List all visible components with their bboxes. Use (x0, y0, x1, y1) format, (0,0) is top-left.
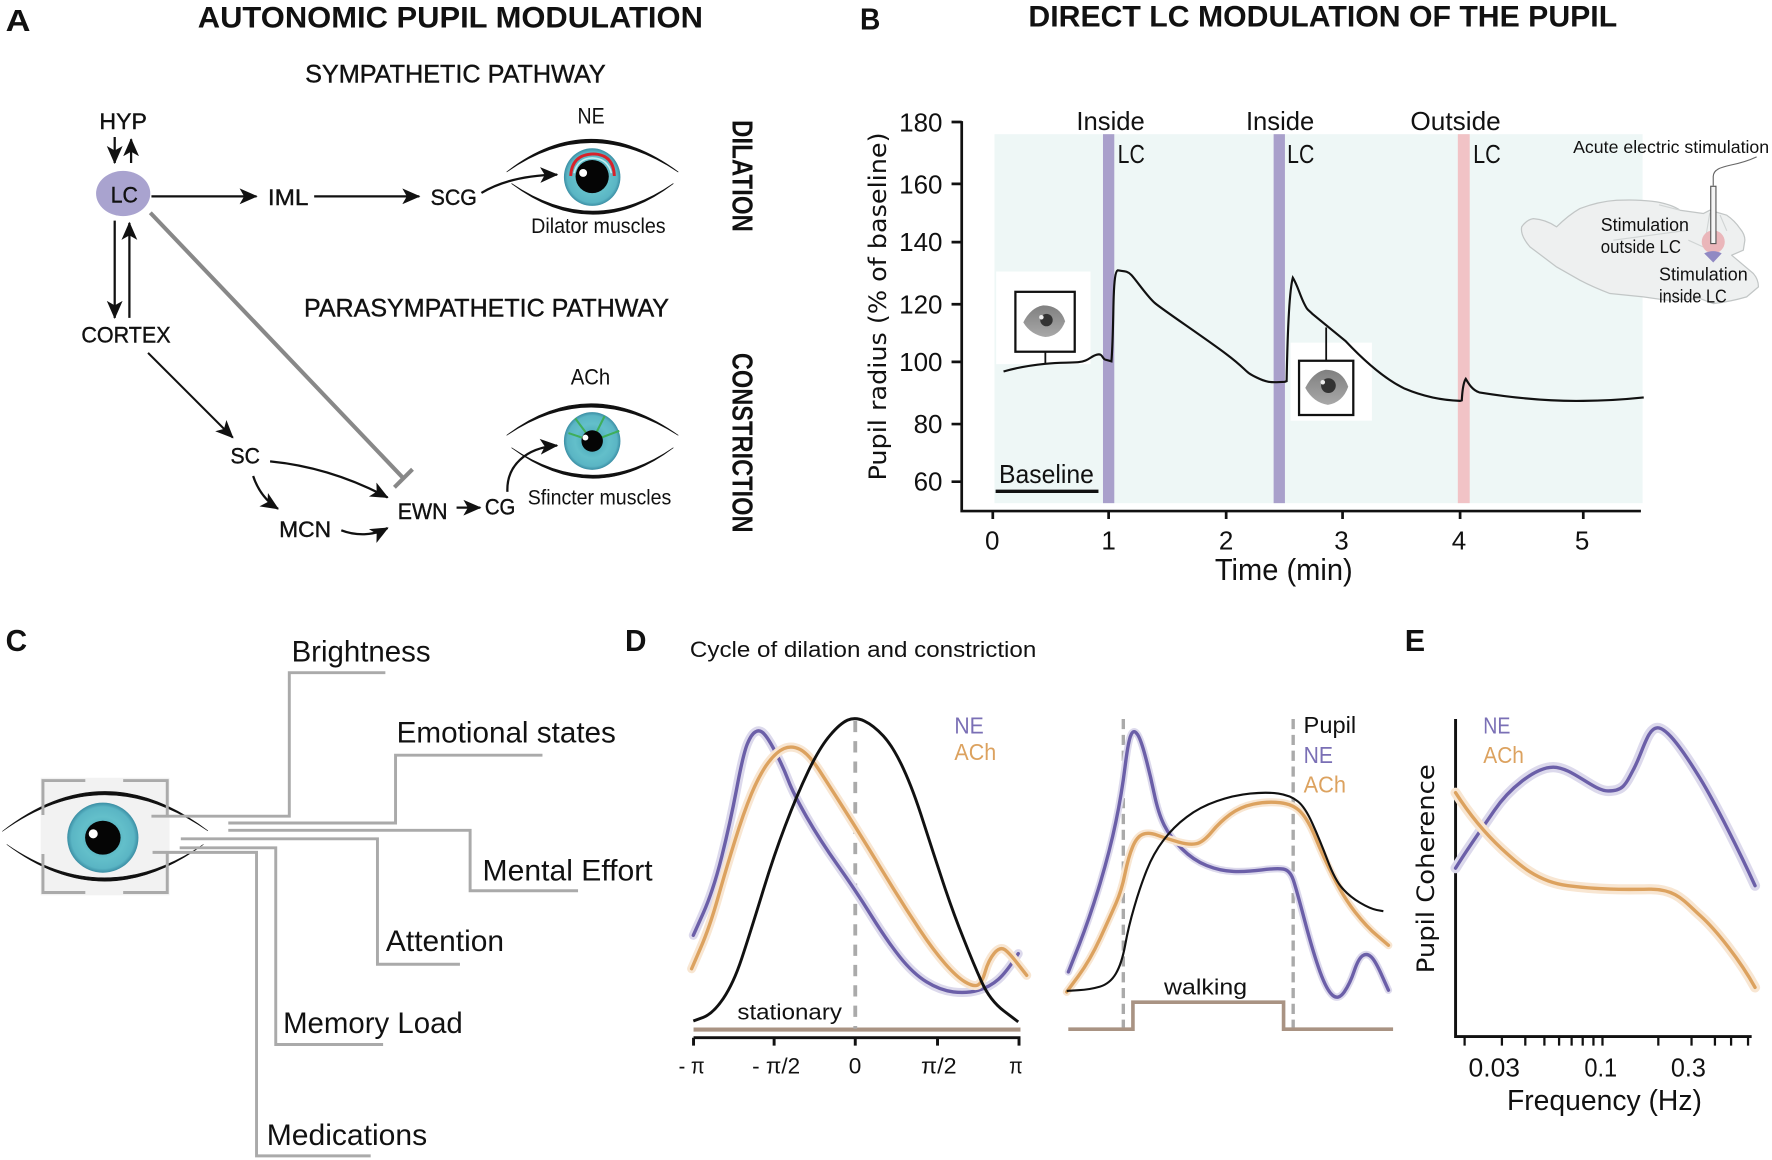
y axis label: Pupil Coherence (1412, 764, 1440, 973)
axes with log ticks (1456, 719, 1752, 1046)
x axis label: Time (min) (1215, 553, 1353, 587)
y axis numbers: 180 (899, 107, 943, 137)
inset: brain diagram: inside LC (1659, 286, 1727, 307)
x axis numbers: 4 (1452, 525, 1466, 555)
labels: stimulation sites: Outside (1410, 106, 1501, 136)
y axis numbers: 100 (899, 347, 943, 377)
title: autonomic pupil modulation: AUTONOMIC PUPIL MODULATION (198, 1, 703, 34)
y axis numbers: 60 (914, 467, 943, 497)
legend (954, 713, 996, 765)
label: NE: NE (577, 103, 605, 128)
label: dilator muscles: Dilator muscles (531, 215, 666, 238)
x axis numbers: 0.03 (1469, 1053, 1520, 1083)
label: mental effort: Mental Effort (483, 855, 653, 888)
phase labels (679, 1053, 1023, 1078)
inset: brain diagram: Stimulation (1601, 214, 1689, 235)
arrow: IML to SCG (314, 195, 419, 197)
x axis numbers: 0 (985, 525, 999, 555)
panel: A autonomic pupil modulation (6, 1, 758, 542)
labels: stimulation sites (1076, 106, 1501, 169)
labels: stimulation sites: Inside (1246, 106, 1314, 136)
panel: C factors affecting the pupil (2, 624, 653, 1156)
phase labels: π (1009, 1053, 1023, 1078)
label: constriction: CONSTRICTION (726, 353, 758, 533)
panel: D cycle of dilation and constriction (625, 624, 1393, 1078)
panel letter B: B (860, 3, 880, 37)
arrow: SCG to eye (481, 175, 557, 193)
labels: stimulation sites: LC (1473, 139, 1501, 169)
node: IML: IML (268, 185, 309, 210)
arrow: cortex to SC (148, 353, 233, 438)
y axis label: Pupil radius (% of baseline) (864, 132, 892, 481)
pupil curve (1067, 793, 1383, 991)
phase labels: π/2 (921, 1053, 957, 1078)
y axis numbers: 120 (899, 289, 943, 319)
node: HYP: HYP (99, 109, 147, 134)
label: attention: Attention (386, 925, 504, 958)
label: sfincter muscles: Sfincter muscles (528, 486, 671, 509)
y axis numbers: 80 (914, 409, 943, 439)
panel letter C: C (6, 624, 27, 658)
phase axis (694, 1038, 1020, 1046)
node: cortex: CORTEX (81, 323, 171, 348)
NE curve (693, 731, 1018, 992)
labels: stimulation sites: LC (1118, 139, 1145, 169)
legend: NE (1483, 713, 1510, 739)
label: medications: Medications (267, 1119, 427, 1152)
heading: cycle: Cycle of dilation and constriction (690, 637, 1036, 662)
icon: eye with sphincter muscles (507, 404, 678, 478)
y axis numbers: 160 (899, 170, 943, 200)
node: MCN: MCN (279, 517, 331, 542)
stationary state bar (694, 1028, 1020, 1031)
x axis numbers: 0.3 (1671, 1053, 1706, 1083)
stimulation bars (1103, 134, 1470, 503)
pupil curve (693, 719, 1018, 1022)
icon: eye with dilator muscles (507, 139, 678, 214)
node: SCG: SCG (431, 185, 477, 210)
x axis numbers: 5 (1575, 525, 1589, 555)
title: direct LC modulation: DIRECT LC MODULATION OF THE PUPIL (1028, 0, 1617, 33)
NE curve (1456, 728, 1755, 886)
label: emotional states: Emotional states (397, 717, 616, 750)
panel: B direct LC modulation (860, 0, 1769, 587)
panel letter D: D (625, 624, 646, 658)
legend: ACh (954, 739, 996, 765)
chart: walking (1067, 712, 1393, 1029)
panel letter A: A (6, 4, 31, 38)
axes (952, 121, 1641, 519)
x axis numbers: 0.1 (1584, 1053, 1617, 1083)
arrows: HYP and LC (115, 137, 131, 163)
y axis numbers: 140 (899, 227, 943, 257)
labels: stimulation sites: Inside (1076, 106, 1145, 136)
x axis numbers: 1 (1101, 525, 1116, 555)
x axis numbers: 2 (1219, 525, 1233, 555)
legend: NE (954, 713, 984, 739)
x axis numbers (985, 525, 1589, 555)
node: SC: SC (231, 444, 260, 469)
label: walking: walking (1163, 975, 1247, 1000)
arrows: LC and cortex (115, 221, 129, 318)
inset: brain diagram (1521, 137, 1769, 307)
legend: ACh (1304, 771, 1346, 797)
inset: dilated pupil photo (1291, 327, 1372, 421)
label: memory load: Memory Load (283, 1007, 463, 1040)
ACh curve (1067, 802, 1388, 992)
arrow: SC to MCN (253, 476, 278, 509)
walking state step (1068, 1002, 1393, 1029)
node: LC: LC (111, 183, 138, 208)
legend: NE (1304, 742, 1333, 768)
arrow: EWN to CG (457, 507, 480, 509)
arrow: MCN to EWN (341, 528, 388, 534)
node: EWN: EWN (398, 499, 448, 524)
heading: sympathetic pathway: SYMPATHETIC PATHWAY (305, 61, 606, 89)
ACh curve (692, 747, 1027, 986)
panel: E pupil coherence (1405, 624, 1755, 1116)
inhibitory line: LC to EWN (150, 213, 412, 487)
phase labels: - π/2 (752, 1053, 800, 1078)
x axis numbers (1469, 1053, 1706, 1083)
y axis numbers (899, 107, 943, 497)
baseline marker: Baseline (999, 459, 1094, 489)
phase labels: - π (679, 1053, 705, 1078)
x axis label: Frequency (Hz) (1507, 1084, 1702, 1116)
label: dilation: DILATION (726, 120, 758, 232)
panel letter E: E (1405, 624, 1425, 658)
chart background (994, 134, 1643, 503)
onset and offset dashed lines (1123, 719, 1293, 1028)
phase labels: 0 (849, 1053, 861, 1078)
labels: stimulation sites: LC (1287, 139, 1314, 169)
legend: ACh (1483, 742, 1524, 768)
phase zero dashed line (854, 721, 857, 1029)
leader lines (151, 673, 578, 1156)
legend: Pupil (1304, 712, 1356, 738)
label: stationary: stationary (737, 1000, 843, 1025)
legend (1483, 713, 1524, 768)
pupil radius curve (1004, 270, 1644, 401)
node: LC (96, 171, 150, 216)
arrow: CG to eye (507, 446, 557, 492)
ACh curve (1456, 793, 1755, 987)
chart: stationary (679, 713, 1027, 1078)
heading: parasympathetic pathway: PARASYMPATHETIC PATHWAY (304, 295, 669, 323)
inset: brain diagram: outside LC (1601, 236, 1681, 257)
node: CG: CG (485, 494, 515, 519)
arrow: SC to EWN (270, 461, 388, 498)
arrow: LC to IML (151, 195, 257, 197)
icon: eye in focus frame (2, 778, 208, 895)
NE curve (1068, 732, 1388, 997)
label: brightness: Brightness (292, 635, 431, 668)
inset: brain diagram: Stimulation (1659, 264, 1748, 285)
label: ACh: ACh (571, 364, 610, 389)
inset: baseline pupil photo (996, 271, 1091, 364)
legend (1304, 712, 1356, 797)
inset: brain diagram: Acute electric stimulation (1573, 137, 1769, 157)
x axis numbers: 3 (1334, 525, 1349, 555)
